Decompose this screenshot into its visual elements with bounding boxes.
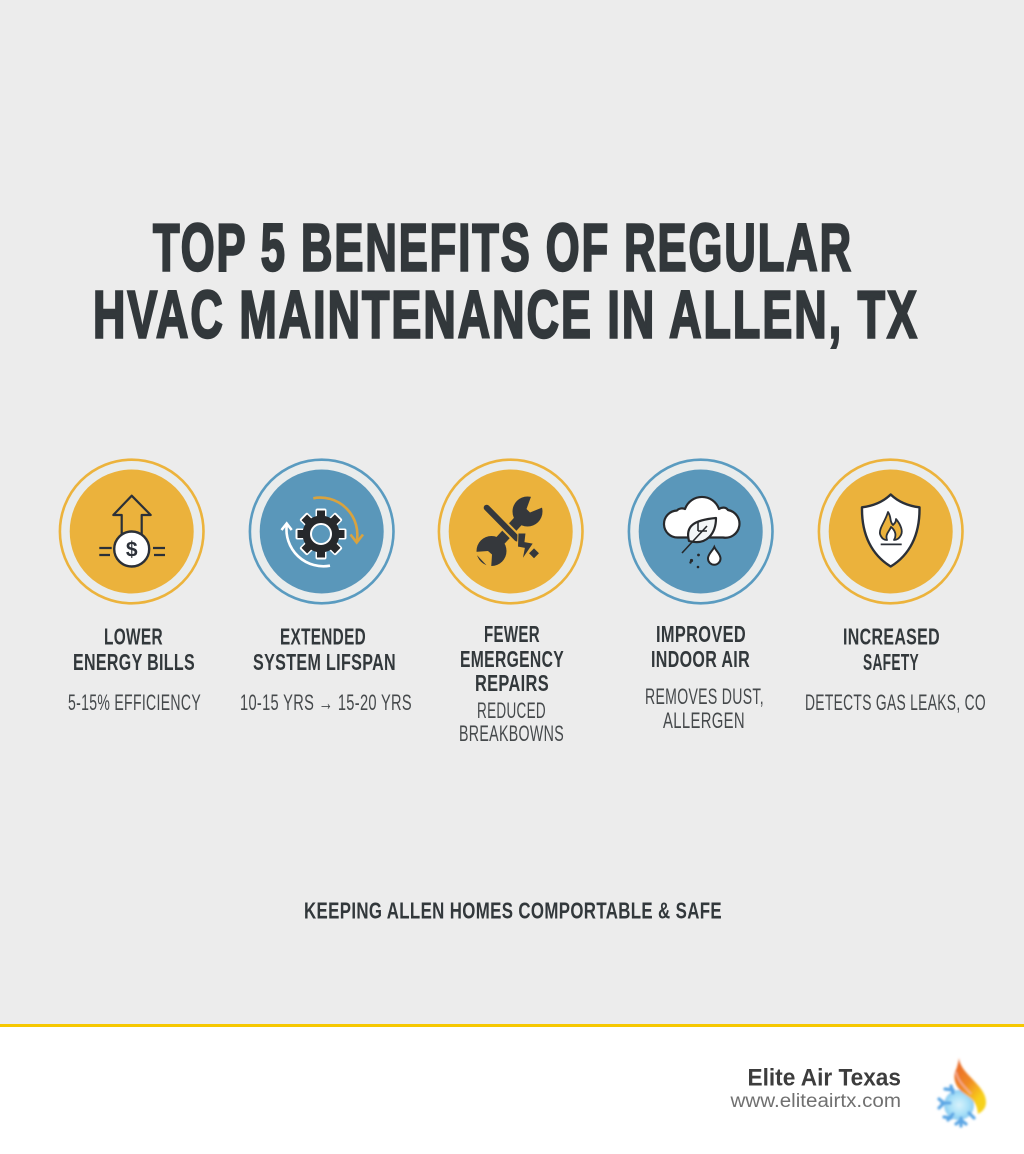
benefit 4: improved indoor air [629, 460, 772, 733]
label: lower energy bills: LOWER [104, 624, 163, 650]
label: improved indoor air: INDOOR AIR [651, 646, 750, 672]
label: fewer emergency repairs: BREAKBOWNS [459, 721, 564, 746]
icon: gear with circular arrows [250, 460, 394, 603]
label: improved indoor air: IMPROVED [656, 621, 746, 647]
label: extended system lifespan [240, 624, 412, 715]
label: increased safety: INCREASED [843, 624, 940, 650]
icon: cloud, leaf and water drop [629, 460, 772, 603]
label: fewer emergency repairs: FEWER [484, 621, 540, 647]
label: fewer emergency repairs: REDUCED [477, 698, 546, 723]
label: fewer emergency repairs [459, 621, 564, 746]
benefit 2: extended system lifespan [240, 460, 412, 715]
label: extended system lifespan: 10-15 YRS → 15-20 YRS [240, 690, 412, 715]
icon: rising arrow and dollar coin [60, 460, 204, 603]
label: improved indoor air [645, 621, 764, 733]
logo: flame and snowflake [939, 1058, 986, 1126]
label: increased safety: SAFETY [863, 649, 919, 675]
icon: crossed wrench and screwdriver with lightning [439, 460, 582, 603]
label: fewer emergency repairs: EMERGENCY [460, 646, 564, 672]
tagline: KEEPING ALLEN HOMES COMPORTABLE & SAFE [304, 898, 722, 924]
benefit 5: increased safety [805, 460, 986, 715]
icon: rising arrow and dollar coin: $ [126, 538, 138, 562]
icon: shield with flame [819, 460, 962, 603]
footer brand text [729, 1064, 901, 1112]
footer brand text: www.eliteairtx.com [729, 1091, 901, 1112]
label: lower energy bills: 5-15% EFFICIENCY [68, 690, 201, 715]
benefit 1: lower energy bills [60, 460, 204, 715]
label: improved indoor air: REMOVES DUST, [645, 684, 764, 709]
label: fewer emergency repairs: REPAIRS [475, 670, 549, 696]
benefit 3: fewer emergency repairs [439, 460, 582, 746]
label: lower energy bills [68, 624, 201, 715]
label: increased safety [805, 624, 986, 715]
footer band [0, 1024, 1024, 1154]
label: lower energy bills: ENERGY BILLS [73, 649, 195, 675]
footer brand text: Elite Air Texas [748, 1064, 901, 1092]
title [93, 210, 919, 352]
label: improved indoor air: ALLERGEN [663, 708, 745, 733]
label: extended system lifespan: EXTENDED [280, 624, 366, 650]
label: extended system lifespan: SYSTEM LIFSPAN [253, 649, 396, 675]
